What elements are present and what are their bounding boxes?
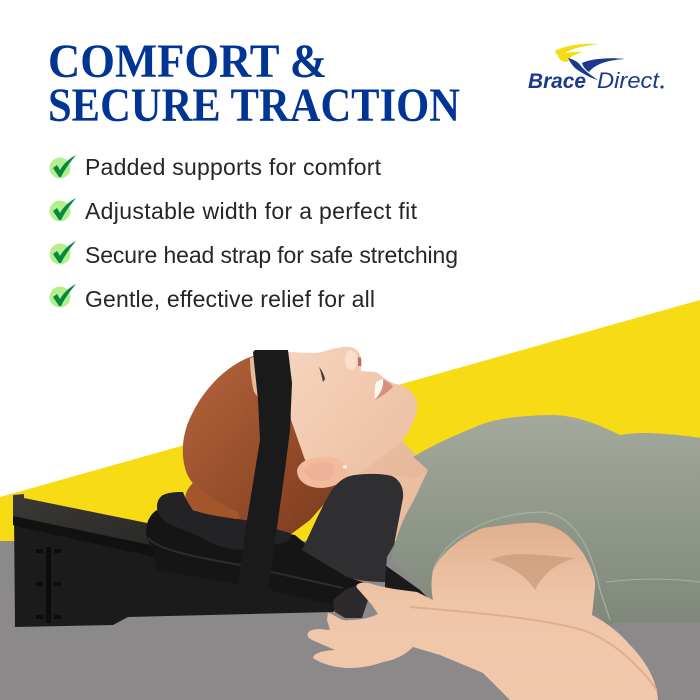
item 3: Secure head strap for safe stretching	[85, 242, 458, 268]
shirt	[392, 415, 700, 625]
logo: Brace Direct: Direct	[597, 68, 660, 93]
logo: Brace Direct	[528, 44, 664, 93]
neck shading	[345, 441, 430, 486]
gray exercise mat	[0, 541, 700, 700]
checklist	[50, 154, 458, 312]
nose and mouth details	[319, 350, 393, 400]
hair	[183, 355, 345, 535]
head strap	[238, 350, 292, 592]
item 2: Adjustable width for a perfect fit	[85, 198, 418, 224]
armpit shadow	[490, 554, 575, 590]
title: SECURE TRACTION	[48, 79, 460, 132]
ear	[297, 457, 349, 488]
arm crease	[410, 607, 657, 690]
item 4: Gentle, effective relief for all	[85, 286, 375, 312]
item 1: Padded supports for comfort	[85, 154, 382, 180]
shadow between neck pad and shirt	[385, 565, 430, 605]
yellow diagonal band	[0, 300, 700, 545]
logo: Brace Direct: Brace	[528, 70, 586, 93]
neck pad	[302, 474, 403, 582]
hairline skin	[250, 355, 260, 400]
hair bun	[185, 482, 240, 519]
arm and hand	[308, 523, 658, 700]
head pad	[157, 492, 291, 550]
head cradle	[146, 510, 385, 618]
title: COMFORT &	[48, 35, 327, 88]
traction device base	[13, 494, 345, 627]
title	[48, 35, 460, 132]
cradle handle	[333, 584, 368, 618]
face and neck	[286, 347, 430, 540]
